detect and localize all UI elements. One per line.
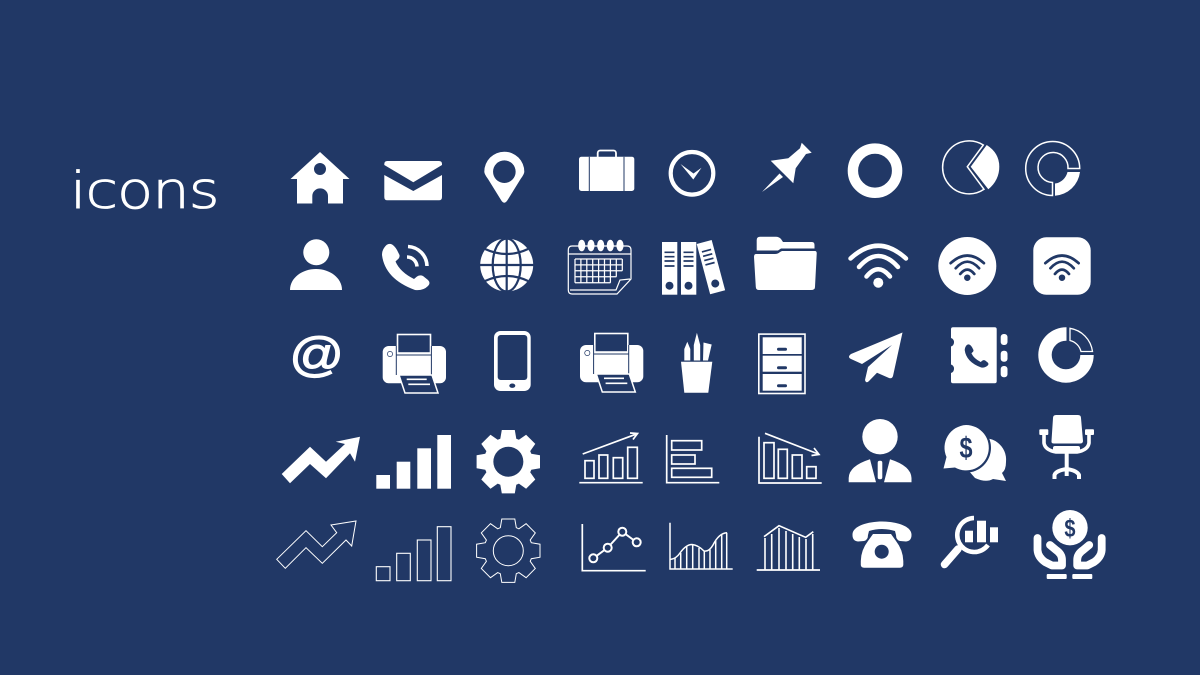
icon: filing cabinet xyxy=(759,334,805,394)
icon: outlined gear xyxy=(477,519,540,582)
icon: at sign: @ xyxy=(289,327,344,381)
icon: hands holding dollar coin xyxy=(1038,510,1102,579)
icon: outlined trend arrow xyxy=(277,521,356,568)
icon: magnifier with bars xyxy=(944,518,998,564)
icon: pencil cup xyxy=(681,333,712,393)
icon: outlined signal bars xyxy=(376,527,451,581)
icon: businessperson xyxy=(849,419,912,482)
icon: person xyxy=(290,239,342,290)
icon: globe xyxy=(480,238,534,292)
icon: rotary telephone xyxy=(852,522,912,568)
icon: address book xyxy=(951,327,1008,383)
icon: wifi xyxy=(850,246,906,288)
icon: clock xyxy=(671,152,713,195)
icon: paper plane xyxy=(849,332,902,382)
icon: dollar speech bubbles: $ xyxy=(959,431,973,465)
icon: segmented ring xyxy=(1026,142,1080,196)
icon: wifi in rounded square xyxy=(1033,237,1091,295)
icon: briefcase xyxy=(579,150,634,191)
icon: pie chart xyxy=(943,141,999,194)
icon: solid trend arrow xyxy=(282,437,360,483)
icon: smartphone xyxy=(494,331,531,391)
icon: office chair xyxy=(1039,415,1094,479)
icon: home xyxy=(290,152,350,204)
icon: ring xyxy=(853,149,897,193)
icon: printer xyxy=(580,334,643,392)
title: icons xyxy=(70,162,220,221)
icon: binders xyxy=(662,240,725,295)
icon: line chart xyxy=(582,524,646,571)
icon: dollar speech bubbles xyxy=(941,423,1006,481)
icon: phone call xyxy=(382,244,430,290)
icon: calendar xyxy=(568,240,631,294)
icon: solid gear xyxy=(477,430,540,493)
icon: horizontal bar chart xyxy=(667,435,719,483)
icon: area bar chart xyxy=(670,523,733,569)
icon: folder xyxy=(754,237,817,290)
icon: rising bar chart xyxy=(579,433,643,483)
icon: envelope xyxy=(384,161,442,200)
icon: solid signal bars xyxy=(376,435,451,489)
icon: printer xyxy=(383,334,446,393)
icon: peak line bar chart xyxy=(757,526,820,570)
icon: push pin xyxy=(762,143,812,192)
icon: donut chart xyxy=(1038,327,1094,383)
icon: wifi in circle xyxy=(938,237,996,295)
icon: falling bar chart xyxy=(759,433,822,483)
icon: map pin xyxy=(484,152,524,203)
icon: hands holding dollar coin: $ xyxy=(1064,514,1076,542)
